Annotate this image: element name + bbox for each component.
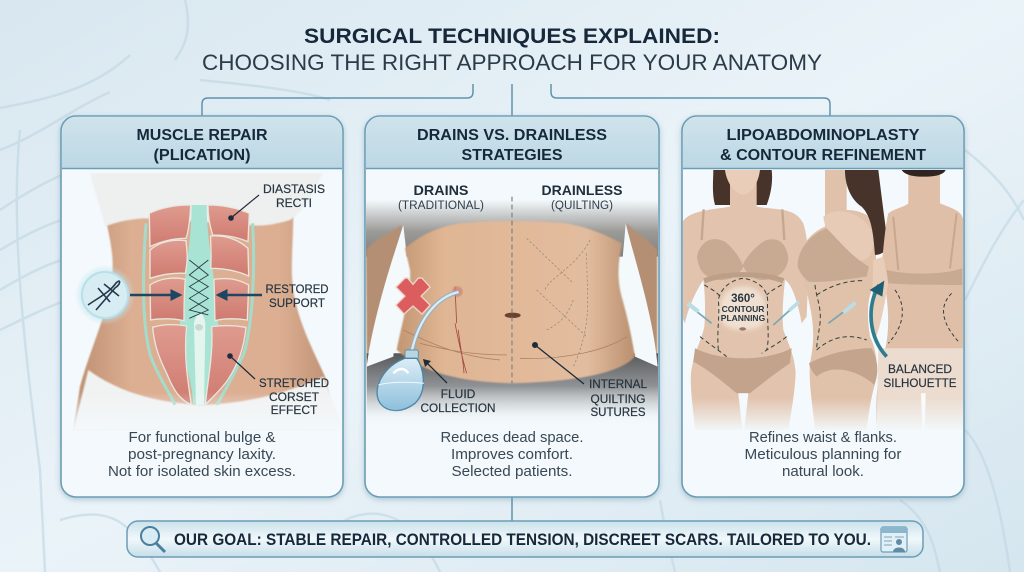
panel header: drains: DRAINS VS. DRAINLESS bbox=[417, 127, 607, 144]
arm stump bbox=[823, 211, 873, 260]
callout: restored support bbox=[266, 282, 329, 310]
underwear bbox=[809, 348, 877, 385]
quilting sutures bbox=[527, 238, 590, 367]
belly label patch bbox=[720, 287, 766, 330]
goal text: OUR GOAL: STABLE REPAIR, CONTROLLED TENSION, DISCREET SCARS. TAILORED TO YOU. bbox=[174, 530, 871, 549]
illustration: abdomen comparison bbox=[360, 197, 665, 497]
icon: patient chart bbox=[881, 527, 907, 552]
callout: restored support: RESTORED bbox=[266, 282, 329, 296]
text: muscle repair description: For functional bulge & bbox=[128, 430, 276, 446]
callout: internal quilting sutures: SUTURES bbox=[590, 405, 646, 419]
text: lipoabdominoplasty description: Refines waist & flanks. bbox=[749, 430, 897, 446]
lower shadow bbox=[366, 353, 658, 414]
panel header: muscle repair: MUSCLE REPAIR bbox=[136, 127, 268, 144]
label: drainless: (QUILTING) bbox=[551, 200, 613, 212]
callout: internal quilting sutures: INTERNAL bbox=[589, 377, 647, 391]
panel header: lipoabdominoplasty: LIPOABDOMINOPLASTY bbox=[726, 127, 920, 144]
white underwear bbox=[73, 370, 343, 430]
arms bbox=[366, 225, 402, 363]
midline bbox=[511, 196, 513, 384]
belly bbox=[397, 221, 635, 383]
callout: stretched corset effect: STRETCHED bbox=[259, 376, 329, 390]
panel header: lipoabdominoplasty bbox=[683, 117, 963, 168]
label: 360 contour planning: 360° bbox=[731, 293, 755, 305]
arrow: right to midline bbox=[218, 294, 262, 296]
torso skin bbox=[73, 210, 337, 430]
callout: diastasis recti: RECTI bbox=[276, 196, 312, 210]
drain tube bbox=[412, 292, 459, 352]
figure: side bbox=[798, 170, 888, 430]
cannula left bbox=[697, 312, 712, 324]
label: drains: DRAINS bbox=[414, 182, 468, 198]
label: balanced silhouette bbox=[884, 362, 956, 390]
drain bulb bbox=[405, 350, 418, 359]
illustration: abdomen with muscles bbox=[74, 174, 332, 428]
underwear bbox=[693, 348, 792, 393]
panel header: muscle repair bbox=[62, 117, 342, 168]
label: 360 contour planning: PLANNING bbox=[721, 313, 766, 323]
illustration: three body views bbox=[683, 170, 963, 428]
callout: fluid collection: FLUID bbox=[441, 387, 476, 401]
callout: diastasis recti: DIASTASIS bbox=[263, 182, 325, 196]
callout: fluid collection: COLLECTION bbox=[420, 401, 496, 415]
cannula right bbox=[772, 310, 790, 326]
mint linea alba bbox=[180, 205, 218, 405]
callout: diastasis recti bbox=[228, 182, 325, 221]
icon: suture magnified bbox=[75, 265, 135, 325]
label: 360 contour planning bbox=[721, 293, 766, 323]
figure: back bbox=[870, 170, 963, 430]
panel: muscle repair bbox=[61, 116, 343, 497]
white top band bbox=[90, 173, 323, 227]
text: drains description bbox=[440, 430, 584, 480]
gaps bbox=[367, 225, 407, 367]
title: SURGICAL TECHNIQUES EXPLAINED: bbox=[304, 25, 720, 48]
panel header: drains bbox=[366, 117, 658, 168]
arrow: left to midline bbox=[130, 294, 180, 296]
top garment shading bbox=[360, 200, 665, 257]
callout: stretched corset effect: CORSET bbox=[269, 390, 320, 404]
callout: fluid collection bbox=[420, 359, 496, 415]
callout: stretched corset effect bbox=[227, 353, 329, 417]
label: 360 contour planning: CONTOUR bbox=[722, 304, 764, 314]
bra bbox=[702, 209, 784, 240]
panel: drains vs drainless bbox=[360, 116, 665, 497]
label: drainless: DRAINLESS bbox=[542, 182, 622, 198]
laced sutures bbox=[189, 260, 208, 318]
goal banner bbox=[127, 521, 923, 557]
text: lipoabdominoplasty description: natural look. bbox=[782, 464, 864, 480]
dashed contour bbox=[700, 278, 787, 357]
curved arrow bbox=[871, 285, 887, 357]
callout: restored support: SUPPORT bbox=[269, 296, 326, 310]
panel header: lipoabdominoplasty: & CONTOUR REFINEMENT bbox=[720, 147, 926, 164]
text: muscle repair description: Not for isolated skin excess. bbox=[108, 464, 296, 480]
callout: stretched corset effect: EFFECT bbox=[271, 403, 318, 417]
callout: internal quilting sutures: QUILTING bbox=[590, 392, 646, 406]
text: lipoabdominoplasty description: Meticulous planning for bbox=[744, 447, 902, 463]
label: balanced silhouette: BALANCED bbox=[888, 362, 952, 376]
text: muscle repair description bbox=[108, 430, 296, 480]
label: drains: (TRADITIONAL) bbox=[398, 200, 484, 212]
cannula bbox=[828, 312, 844, 324]
dashed contour bbox=[815, 281, 867, 350]
rectus muscles bbox=[149, 205, 249, 405]
title: CHOOSING THE RIGHT APPROACH FOR YOUR ANATOMY bbox=[202, 50, 822, 75]
text: drains description: Selected patients. bbox=[452, 464, 572, 480]
text: muscle repair description: post-pregnancy laxity. bbox=[128, 447, 276, 463]
icon: red cross bbox=[396, 278, 430, 314]
panel header: drains: STRATEGIES bbox=[462, 147, 563, 164]
label: drainless bbox=[542, 182, 622, 212]
label: drains bbox=[398, 182, 484, 212]
text: drains description: Reduces dead space. bbox=[440, 430, 584, 446]
panel header: muscle repair: (PLICATION) bbox=[154, 147, 250, 164]
figure: front bbox=[682, 170, 808, 430]
label: balanced silhouette: SILHOUETTE bbox=[884, 376, 956, 390]
callout: internal quilting sutures bbox=[532, 342, 647, 419]
bra bbox=[798, 228, 869, 282]
panel: lipoabdominoplasty bbox=[682, 116, 964, 497]
text: drains description: Improves comfort. bbox=[451, 447, 573, 463]
text: lipoabdominoplasty description bbox=[744, 430, 902, 480]
belly creases bbox=[403, 330, 627, 360]
title bbox=[202, 25, 822, 75]
connector lines bbox=[202, 84, 830, 521]
icon: magnifying glass bbox=[141, 527, 165, 552]
